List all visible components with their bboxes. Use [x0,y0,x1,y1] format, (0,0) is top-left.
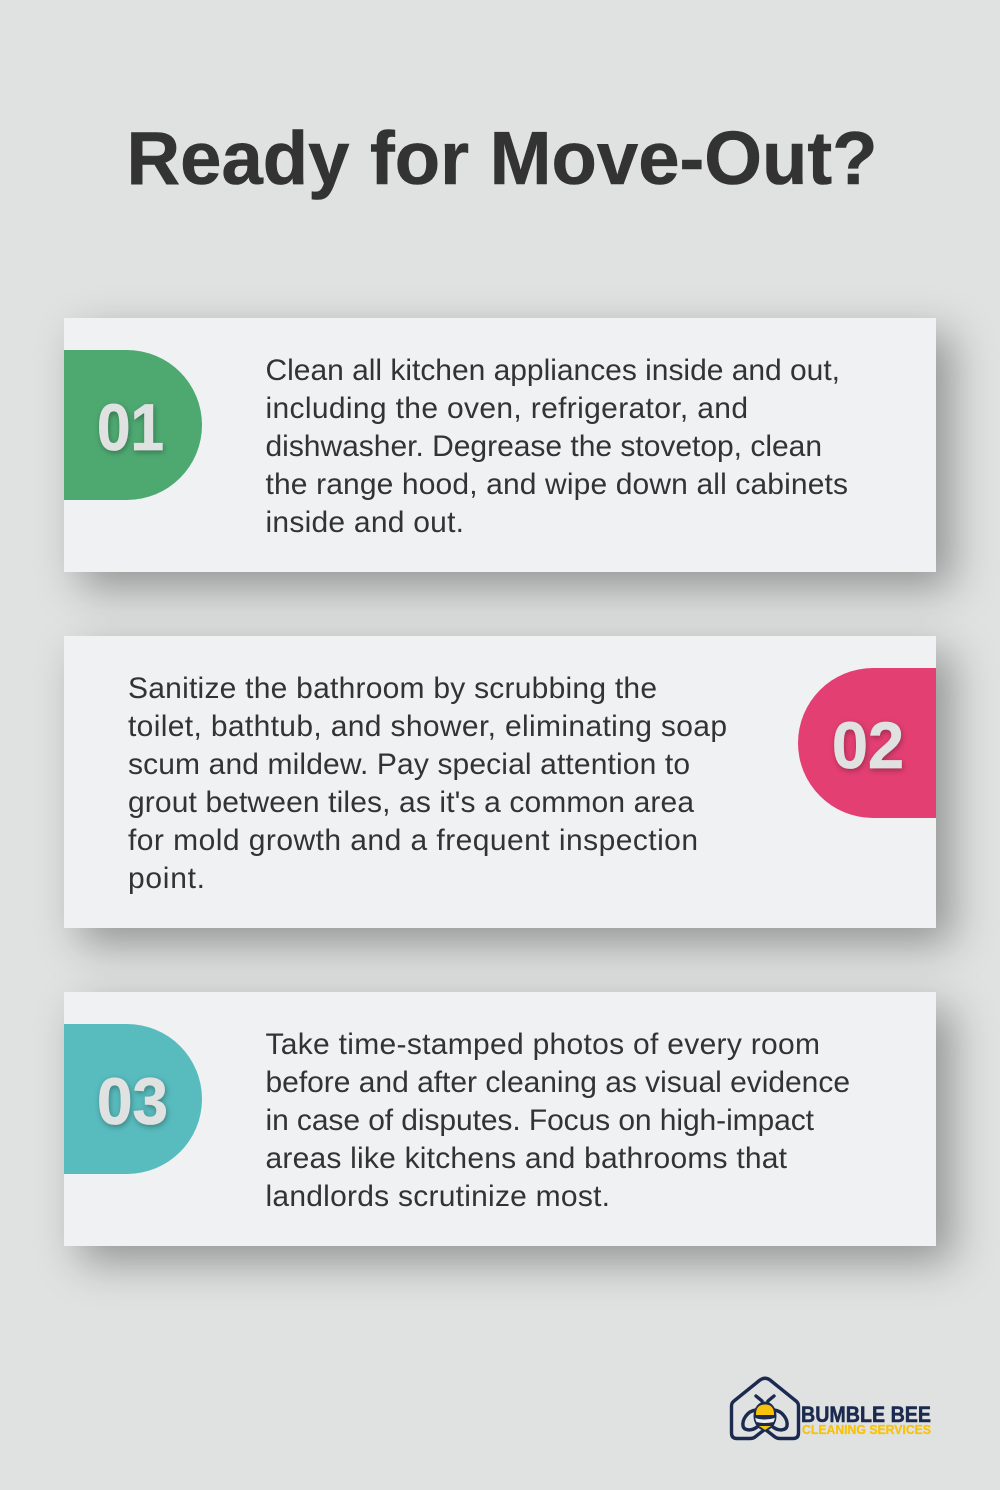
title: Ready for Move-Out? [126,116,878,200]
text: photo instructions: Take time-stamped photos of every room [266,1028,820,1061]
text: photo instructions: areas like kitchens and bathrooms that [266,1142,788,1175]
text: bathroom instructions: Sanitize the bathroom by scrubbing the [128,672,657,705]
badge: 02: 02 [832,708,904,782]
panel: step 03 photos [64,992,936,1246]
text: photo instructions: landlords scrutinize most. [266,1180,610,1213]
text: kitchen instructions [266,354,848,539]
wordmark: CLEANING SERVICES: CLEANING SERVICES [802,1423,931,1437]
text: photo instructions: before and after cleaning as visual evidence [266,1066,850,1099]
text: bathroom instructions: grout between tiles, as it's a common area [128,786,694,819]
badge: 01 [64,350,202,500]
text: photo instructions [266,1028,850,1213]
panel: step 01 kitchen [64,318,936,572]
badge: 01: 01 [97,390,164,464]
badge: 03 [64,1024,202,1174]
panel: step 02 bathroom [64,636,936,928]
text: kitchen instructions: dishwasher. Degrease the stovetop, clean [266,430,822,463]
text: bathroom instructions [128,672,727,895]
text: photo instructions: in case of disputes. Focus on high-impact [266,1104,815,1137]
text: bathroom instructions: scum and mildew. Pay special attention to [128,748,690,781]
text: bathroom instructions: point. [128,862,205,895]
text: kitchen instructions: Clean all kitchen appliances inside and out, [266,354,840,387]
logo: Bumble Bee Cleaning Services [730,1376,931,1440]
text: bathroom instructions: for mold growth and a frequent inspection [128,824,698,857]
badge: 03: 03 [97,1064,168,1138]
icon: bee body [754,1402,776,1430]
badge: 02 [798,668,936,818]
icon: house outline with wings [732,1378,798,1438]
text: kitchen instructions: the range hood, and wipe down all cabinets [266,468,848,501]
wordmark: BUMBLE BEE: BUMBLE BEE [801,1402,931,1427]
text: kitchen instructions: inside and out. [266,506,464,539]
text: kitchen instructions: including the oven, refrigerator, and [266,392,748,425]
text: bathroom instructions: toilet, bathtub, and shower, eliminating soap [128,710,727,743]
